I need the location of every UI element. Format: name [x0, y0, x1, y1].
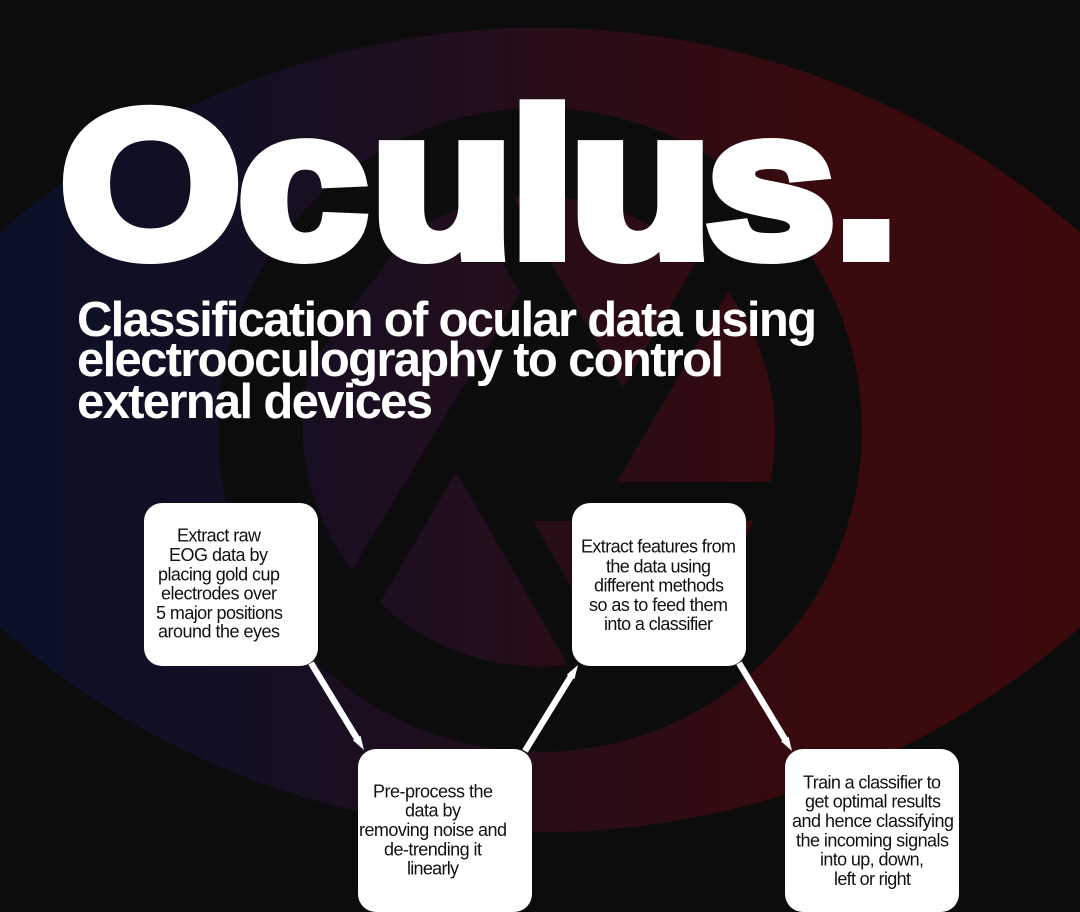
step 3 box: Extract features from	[581, 537, 736, 557]
step 3 box: into a classifier	[604, 614, 713, 634]
step 4 box: and hence classifying	[792, 811, 954, 831]
step 3 box: different methods	[594, 576, 724, 596]
subtitle: electrooculography to control	[77, 333, 724, 387]
step 1 box: around the eyes	[158, 622, 280, 642]
step 4 box	[785, 749, 959, 912]
step 2 box: linearly	[407, 859, 459, 879]
subtitle: Classification of ocular data using	[77, 293, 817, 347]
subtitle: external devices	[77, 375, 433, 429]
step 4 box: left or right	[834, 869, 911, 889]
arrow: step 2 to step 3	[522, 665, 578, 753]
step 3 box	[572, 503, 746, 666]
step 1 box	[144, 503, 318, 666]
step 2 box	[358, 749, 532, 912]
step 3 box: so as to feed them	[589, 595, 728, 615]
step 1 box: 5 major positions	[156, 603, 283, 623]
title: Oculus.	[60, 68, 899, 300]
step 1 box: EOG data by	[169, 545, 268, 565]
step 4 box: Train a classifier to	[803, 772, 941, 792]
step 1 box: electrodes over	[161, 583, 277, 603]
step 3 box: the data using	[606, 556, 711, 576]
step 2 box: data by	[405, 801, 461, 821]
step 1 box: Extract raw	[177, 526, 262, 546]
step 4 box: the incoming signals	[796, 830, 949, 850]
arrow: step 3 to step 4	[736, 661, 792, 751]
step 4 box: into up, down,	[820, 850, 924, 870]
step 2 box: de-trending it	[384, 839, 482, 859]
aperture iris blades	[303, 196, 775, 667]
step 1 box: placing gold cup	[158, 565, 280, 585]
step 2 box: Pre-process the	[373, 781, 493, 801]
step 2 box: removing noise and	[359, 820, 507, 840]
arrow: step 1 to step 2	[308, 661, 364, 750]
step 4 box: get optimal results	[805, 792, 941, 812]
subtitle	[77, 293, 817, 429]
